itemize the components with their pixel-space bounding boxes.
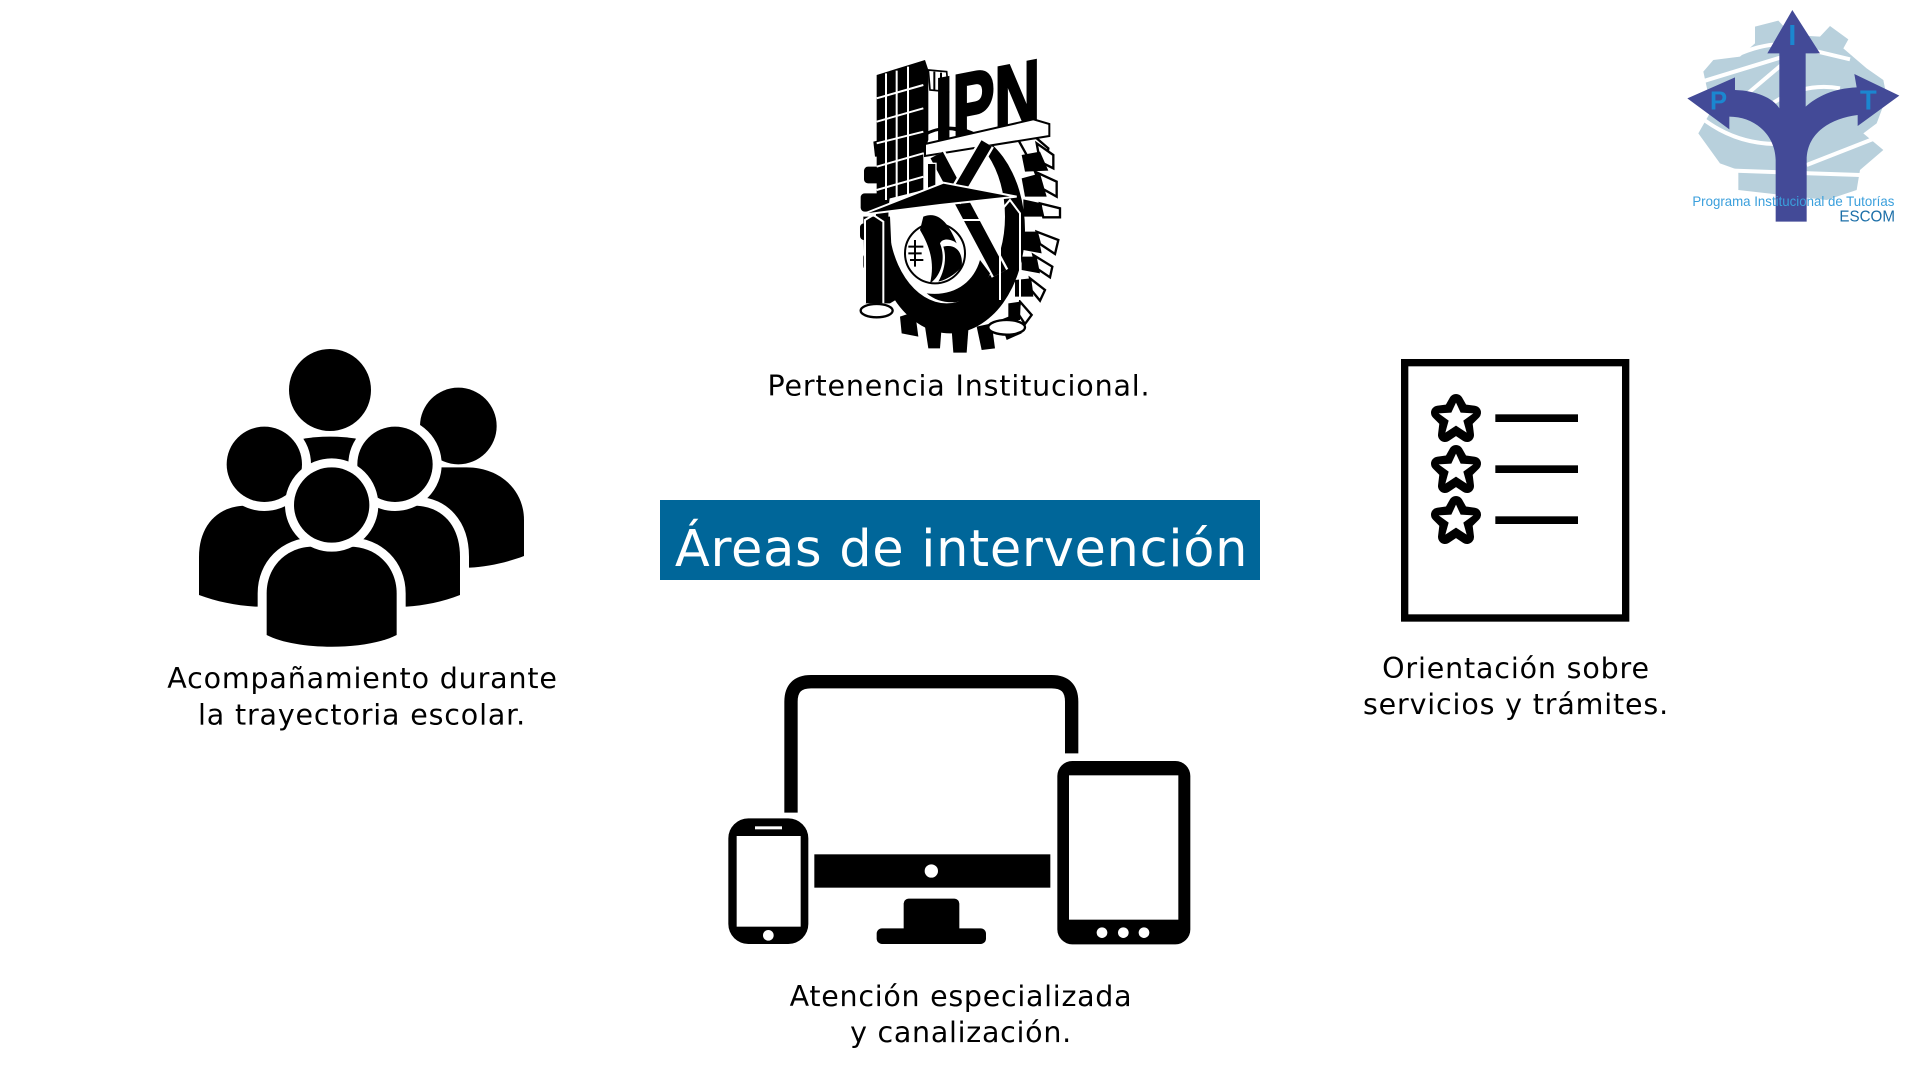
label: Orientación: servicios y trámites.	[1363, 688, 1669, 721]
emblem gear teeth right: black fronts	[1008, 152, 1048, 320]
emblem gear teeth right: white side faces	[1018, 134, 1060, 324]
icon: IPN emblem	[860, 40, 1060, 353]
emblem gear ring	[875, 127, 1025, 333]
logo letter T: T	[1860, 84, 1877, 115]
emblem X bars	[937, 143, 1000, 273]
logo: PIT Programa Institucional de Tutorías	[1687, 10, 1899, 225]
monitor stand	[877, 899, 986, 944]
label: Orientación: Orientación sobre	[1382, 652, 1650, 685]
label: Atención: y canalización.	[850, 1016, 1072, 1049]
monitor bar	[814, 854, 1050, 888]
logo program name: Programa Institucional de Tutorías	[1692, 193, 1894, 209]
icon: checklist with stars	[1405, 363, 1626, 618]
icon: devices	[728, 682, 1190, 944]
label: Pertenencia Institucional: Pertenencia Institucional.	[768, 370, 1150, 402]
logo ESCOM: ESCOM	[1839, 208, 1895, 225]
person back right	[413, 388, 524, 568]
logo arrows	[1687, 10, 1899, 222]
emblem inner crescent	[927, 260, 990, 302]
emblem scale right dish	[988, 320, 1025, 335]
emblem building tower	[877, 60, 948, 202]
title banner	[660, 500, 1260, 580]
logo background: light blue gear map	[1698, 21, 1887, 200]
emblem inner black fill left side	[863, 217, 907, 303]
title text: Áreas de intervención	[675, 518, 1248, 579]
emblem torch	[927, 163, 936, 193]
checklist lines	[1495, 414, 1578, 524]
emblem globe and eagle	[905, 215, 965, 283]
banner background	[660, 500, 1260, 580]
label: Acompañamiento: Acompañamiento durante	[167, 662, 558, 695]
logo letter I: I	[1788, 20, 1796, 52]
person back top	[289, 349, 371, 480]
person front	[267, 467, 397, 647]
emblem scale left dish	[861, 304, 893, 317]
emblem roof	[861, 183, 1017, 215]
phone	[728, 818, 808, 944]
checklist star outlines	[1438, 401, 1474, 537]
tablet	[1057, 761, 1190, 944]
checklist star centres	[1439, 403, 1473, 535]
emblem gear teeth left and bottom	[860, 140, 1022, 353]
emblem letters IPN: IPN	[935, 40, 1040, 163]
checklist frame	[1405, 363, 1626, 618]
icon: group of people	[199, 349, 524, 647]
emblem shelf under letters	[925, 119, 1049, 156]
label: Acompañamiento: la trayectoria escolar.	[198, 698, 526, 732]
label: Atención: Atención especializada	[790, 980, 1132, 1013]
logo letter P: P	[1710, 87, 1727, 115]
person middle row	[199, 427, 460, 607]
emblem pillars	[865, 200, 1020, 303]
monitor frame	[791, 682, 1072, 813]
